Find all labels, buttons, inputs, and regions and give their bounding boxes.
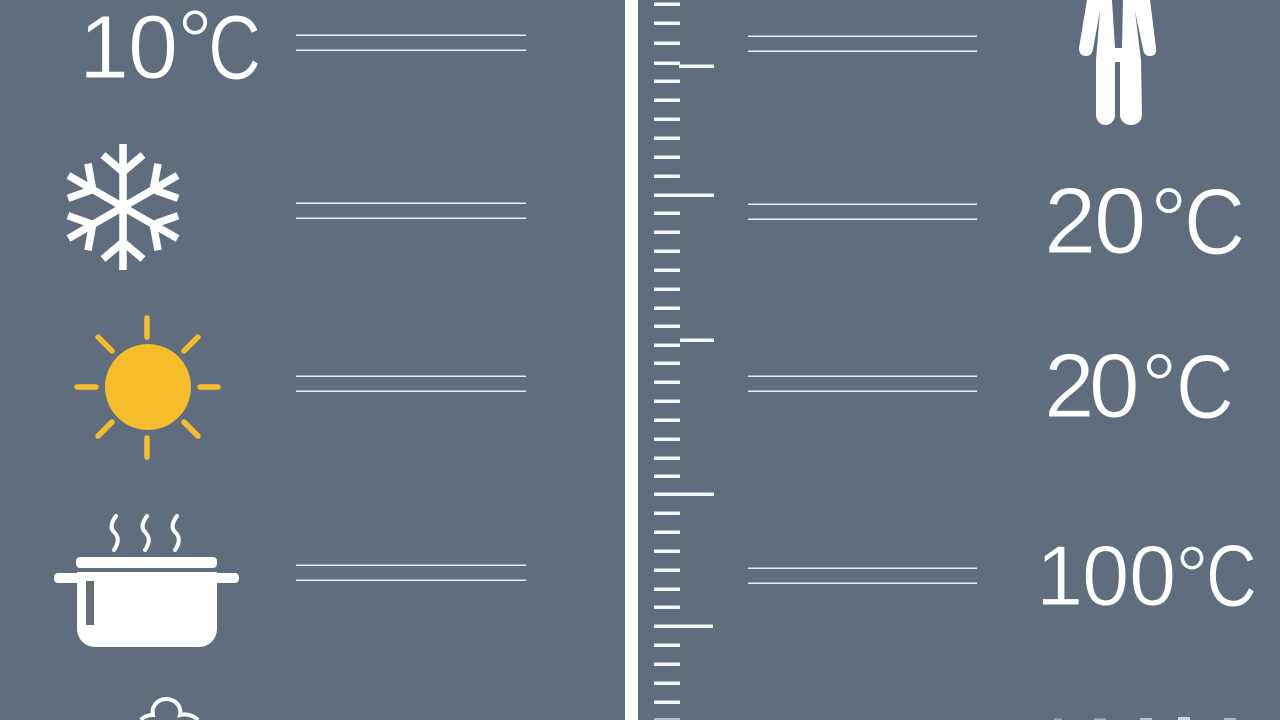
temperature: 20°C room: C	[1176, 336, 1234, 438]
temperature: 100°C: C	[1206, 526, 1257, 625]
temperature: 20°C room: °	[1141, 336, 1177, 437]
icon: snowflake	[58, 144, 188, 270]
temperature: 20°C room: 0	[1089, 336, 1140, 437]
temperature: 20°C room: 2	[1044, 336, 1095, 437]
temperature: 20°C body: °	[1150, 168, 1188, 273]
temperature: 100°C	[1036, 526, 1257, 625]
icon: cloud outline clipped at bottom	[141, 699, 198, 720]
right label placeholder lines	[748, 36, 977, 584]
icon: person	[1079, 0, 1156, 125]
temperature: 100°C: °	[1175, 530, 1209, 625]
icon: boiling pot	[54, 516, 239, 647]
temperature: 20°C body: 0	[1094, 168, 1146, 273]
temperature: 100°C: 0	[1129, 529, 1176, 624]
temperature: 10°C: 0	[128, 0, 178, 98]
clipped tops of the bottom temperature value	[1054, 717, 1236, 720]
temperature: 20°C body	[1044, 168, 1245, 274]
temperature: 10°C: 1	[79, 0, 129, 98]
temperature: 100°C: 0	[1082, 529, 1129, 624]
temperature: 100°C: 1	[1036, 529, 1083, 624]
left label placeholder lines	[296, 34, 526, 581]
temperature: 20°C body: C	[1184, 169, 1245, 274]
temperature: 20°C room	[1044, 336, 1234, 438]
temperature: 10°C	[79, 0, 261, 99]
thermometer scale ticks	[654, 2, 714, 720]
temperature: 20°C body: 2	[1044, 168, 1096, 273]
thermometer tube wall	[625, 0, 638, 720]
icon: sun	[77, 318, 218, 457]
